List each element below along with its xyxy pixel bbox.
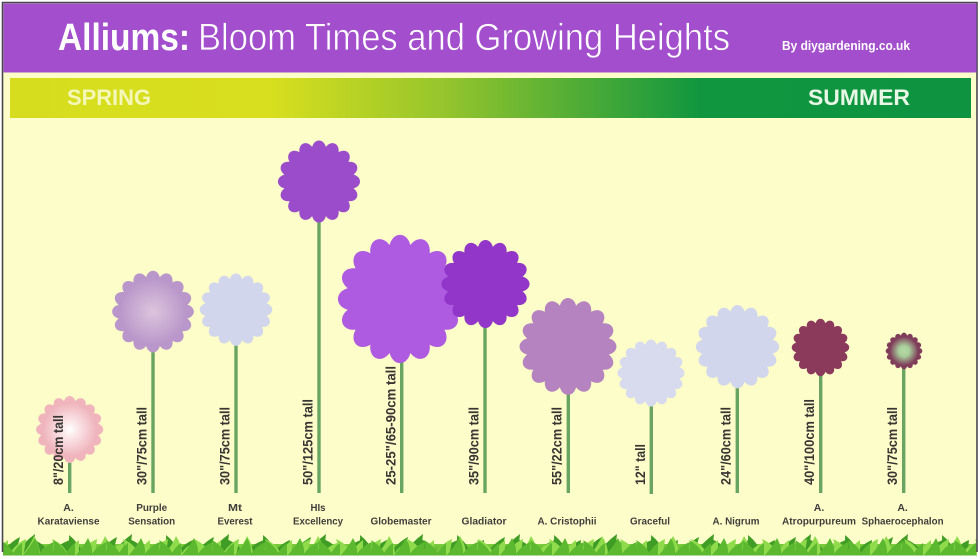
allium: Mt Everest: 30"/75cm tall [218, 407, 233, 485]
allium: Gladiator: 35"/90cm tall [467, 407, 482, 485]
allium: A. Sphaerocephalon: A. [897, 502, 908, 514]
allium: Mt Everest [200, 273, 272, 528]
allium: Gladiator: Gladiator [462, 516, 506, 528]
allium: A. Atropurpureum: 40"/100cm tall [802, 399, 817, 485]
allium: A. Karataviense: A. [63, 502, 74, 514]
allium: Graceful: Graceful [630, 516, 670, 528]
allium: HIs Excellency: 50"/125cm tall [301, 399, 316, 485]
spring label: SPRING [67, 85, 151, 110]
allium: A. Sphaerocephalon [862, 333, 944, 528]
allium: A. Nigrum: 24"/60cm tall [719, 407, 734, 485]
allium: Globemaster: Globemaster [370, 516, 432, 528]
credit: By diygardening.co.uk [782, 39, 910, 53]
allium: A. Cristophii [520, 298, 616, 528]
title: Alliums: [58, 17, 190, 59]
title: Bloom Times and Growing Heights [198, 17, 730, 59]
allium: Mt Everest: Mt [228, 502, 243, 514]
allium: A. Atropurpureum [782, 319, 856, 528]
allium: Globemaster [338, 235, 462, 528]
allium: Graceful [617, 339, 685, 528]
allium: Purple Sensation [112, 271, 194, 528]
allium: A. Karataviense: Karataviense [38, 516, 100, 528]
allium: Mt Everest: Everest [218, 516, 253, 528]
allium: Globemaster: 25-25"/65-90cm tall [383, 366, 398, 485]
allium: A. Cristophii: A. Cristophii [538, 516, 597, 528]
season gradient bar [10, 78, 971, 118]
allium: HIs Excellency [278, 140, 360, 528]
allium: A. Atropurpureum: A. [814, 502, 824, 514]
summer label: SUMMER [808, 85, 910, 110]
allium: A. Nigrum: A. Nigrum [712, 516, 760, 528]
allium: A. Karataviense: 8"/20cm tall [51, 415, 66, 485]
allium: A. Cristophii: 55"/22cm tall [549, 407, 564, 485]
allium: HIs Excellency: HIs [310, 502, 326, 514]
allium: A. Nigrum [696, 305, 779, 528]
allium: Gladiator [441, 240, 530, 528]
allium: Purple Sensation: 30"/75cm tall [134, 407, 150, 485]
grass strip [3, 531, 977, 556]
allium: A. Karataviense [36, 396, 103, 528]
allium: Graceful: 12" tall [633, 444, 648, 485]
allium: A. Atropurpureum: Atropurpureum [782, 516, 856, 528]
allium: Purple Sensation: Purple [136, 502, 167, 514]
allium: A. Sphaerocephalon: 30"/75cm tall [885, 407, 900, 485]
allium: A. Sphaerocephalon: Sphaerocephalon [862, 516, 944, 528]
allium: Purple Sensation: Sensation [128, 516, 175, 528]
header band [4, 4, 976, 72]
allium: HIs Excellency: Excellency [293, 516, 343, 528]
